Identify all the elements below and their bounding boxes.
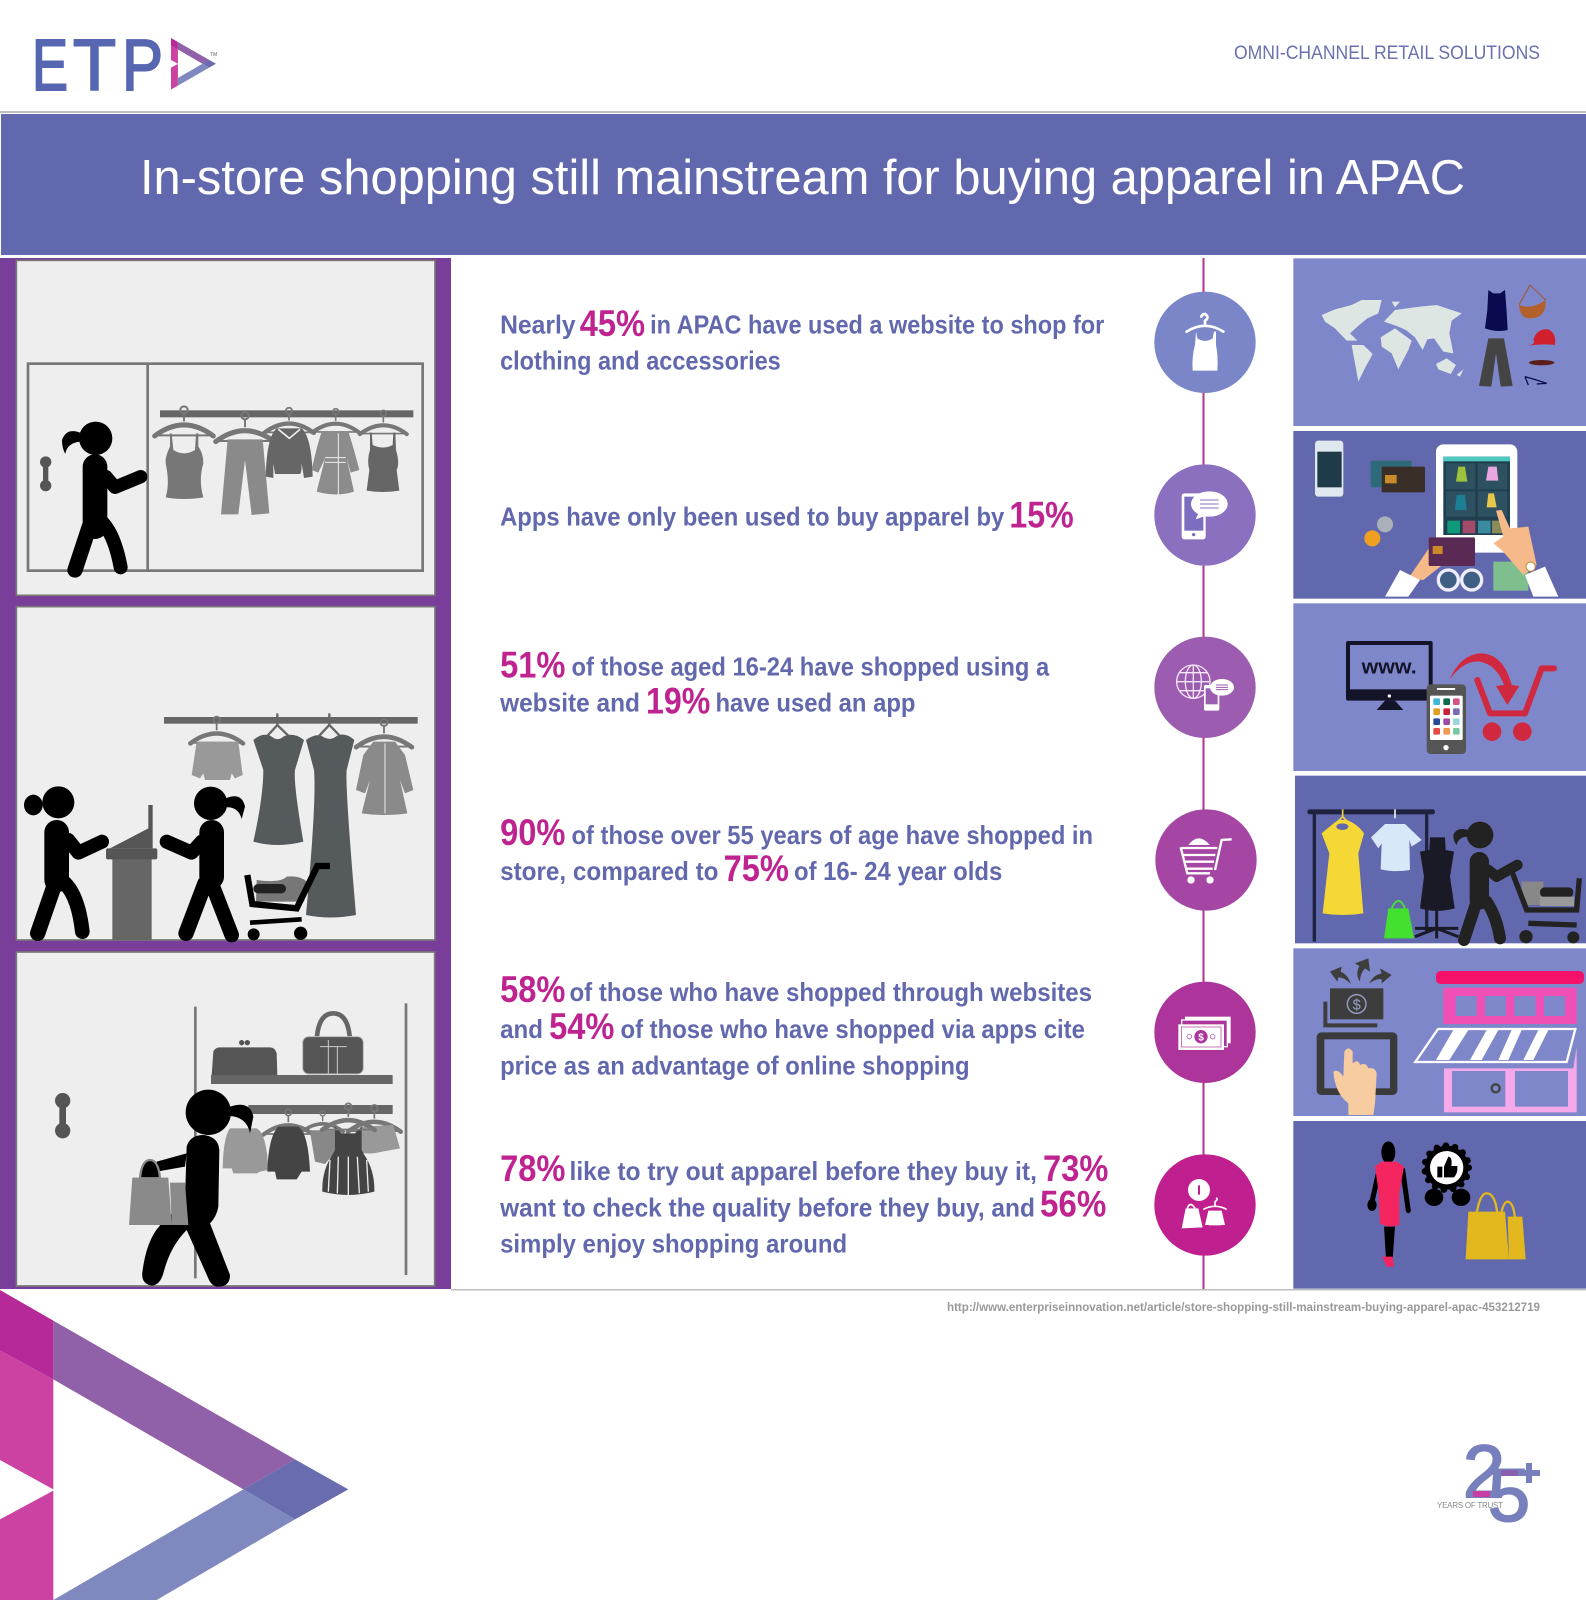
badge: 25+ years of trust: YEARS OF TRUST [1437,1501,1503,1510]
stat text: aged 16-24: of those aged 16-24 have shopped using a [572,654,1050,682]
stat text: website use: in APAC have used a website to shop for [650,312,1104,340]
icon: banknotes [1154,982,1256,1083]
stat text: try before buying: 78% [500,1148,565,1189]
stat text: over 55 [500,812,1093,889]
source URL: http://www.enterpriseinnovation.net/article/store-shopping-still-mainstream-buying-apparel-apac-453212719 [947,1302,1540,1314]
stat text: website use [500,303,1104,375]
stat text: try before buying: 56% [1040,1184,1106,1225]
logo: ETP [32,26,217,106]
panel: woman leaving with bags [16,952,435,1287]
stat text: try before buying: 73% [1043,1148,1108,1189]
title banner [1,114,1586,255]
logo: ETP: T [73,26,116,106]
tagline: OMNI-CHANNEL RETAIL SOLUTIONS [1234,43,1540,64]
stat text: over 55: of 16- 24 year olds [794,858,1002,886]
stat text: price advantage: and [500,1016,543,1044]
panel: checkout counter [16,607,435,940]
stat text: aged 16-24: have used an app [715,689,915,717]
stat text: try before buying: simply enjoy shopping around [500,1230,847,1258]
stat text: aged 16-24: website and [499,689,640,717]
panel: world map and apparel [1293,258,1586,426]
panel: online versus store [1293,948,1586,1116]
stat text: price advantage: of those who have shopped through websites [569,979,1092,1007]
panel: online versus store: $ [1353,997,1361,1013]
stat text: price advantage: 58% [500,969,565,1010]
logo: ETP: P [122,26,163,106]
icon: information, bag and shirt [1154,1154,1256,1256]
panel: in-store shopper with cart [1295,776,1586,943]
panel: website, app and cart: www. [1361,655,1417,678]
stat text: over 55: 90% [500,812,565,853]
stat text: over 55: of those over 55 years of age have shopped in [572,822,1093,850]
stat text: price advantage: of those who have shopped via apps cite [621,1016,1085,1044]
stat text: aged 16-24: 51% [500,645,565,686]
stat text: apps: Apps have only been used to buy apparel by [500,504,1005,532]
icon: dress on hanger [1154,292,1256,393]
panel: website, app and cart [1293,603,1586,771]
panel: left store illustrations [0,258,451,1289]
stat text: try before buying: like to try out apparel before they buy it, [569,1158,1037,1186]
decorative logo triangle [0,1290,348,1600]
icon: globe and phone [1154,637,1256,738]
stat text: apps: 15% [1009,495,1074,536]
icon: phone with chat bubble [1154,464,1256,566]
stat text: aged 16-24: 19% [646,680,710,721]
panel: mobile shopping [1293,431,1586,599]
panel: woman at shop window [16,260,435,595]
icon: shopping cart [1155,809,1257,911]
badge: 25+ years of trust: 5 [1488,1454,1530,1537]
stat text: try before buying: want to check the quality before they buy, and [499,1195,1035,1223]
title banner: In-store shopping still mainstream for buying apparel in APAC [140,151,1465,205]
stat text: website use: 45% [580,303,645,344]
logo: ETP: TM [210,52,217,58]
timeline line [1202,258,1204,1289]
panel: quality and try-on [1293,1121,1586,1289]
stat text: website use: clothing and accessories [500,347,781,375]
stat text: try before buying [499,1148,1108,1258]
icon: banknotes: $ [1198,1032,1204,1043]
stat text: over 55: 75% [724,848,789,889]
stat text: price advantage: price as an advantage of online shopping [500,1053,970,1081]
badge: 25+ years of trust: 2 [1463,1430,1505,1513]
stat text: price advantage: 54% [549,1006,614,1047]
stat text: apps [500,495,1074,536]
stat text: price advantage [500,969,1092,1081]
stat text: website use: Nearly [500,312,576,340]
stat text: over 55: store, compared to [500,858,719,886]
logo: ETP: E [32,26,68,106]
badge: 25+ years of trust [1437,1430,1540,1537]
stat text: aged 16-24 [499,645,1050,721]
